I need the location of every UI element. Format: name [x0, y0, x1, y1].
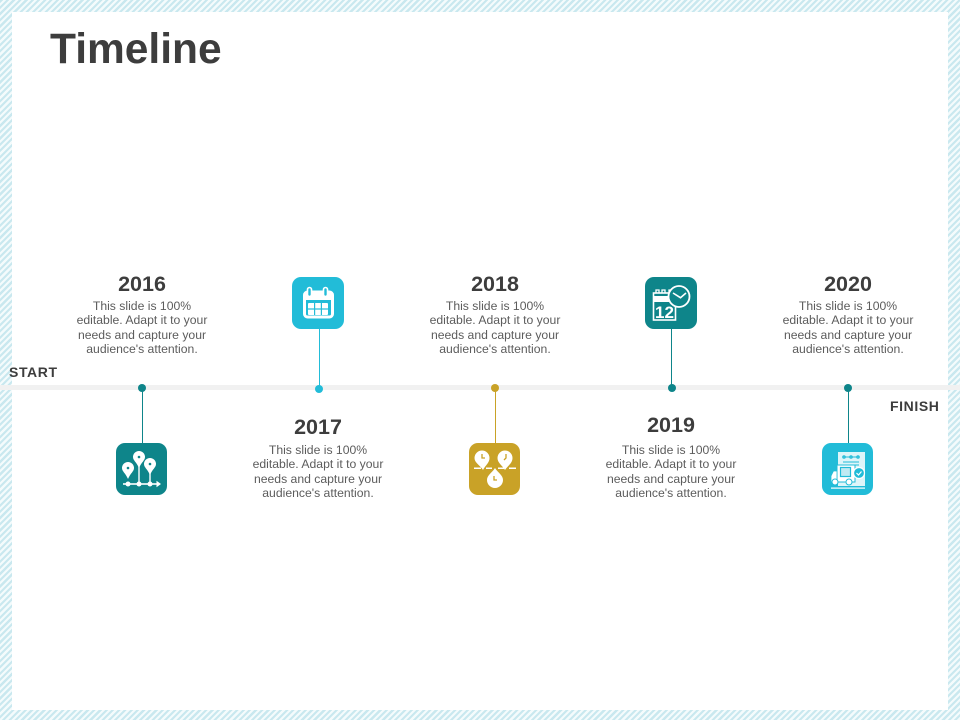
icon: map pins on a line [116, 443, 167, 495]
milestone 2017 text: 2017 [294, 415, 342, 439]
milestone 2018 text [430, 272, 560, 356]
milestone 2018 text: editable. Adapt it to your [430, 313, 560, 327]
milestone 2019 text: audience's attention. [615, 486, 727, 500]
milestone 2016 text: audience's attention. [86, 342, 198, 356]
milestone 2017 text [253, 415, 384, 500]
icon: calendar 12 with clock: 12 [655, 303, 674, 322]
milestone 2017 text: needs and capture your [254, 472, 382, 486]
dot 2017 [314, 384, 322, 392]
timeline bar [0, 385, 960, 390]
milestone 2020 text: needs and capture your [784, 328, 912, 342]
milestone 2020 text: This slide is 100% [799, 299, 897, 313]
milestone 2016 text: needs and capture your [78, 328, 206, 342]
icon: delivery document [822, 443, 873, 495]
milestone 2019 text [606, 413, 736, 500]
milestone 2020 text [783, 272, 914, 356]
connector 2018 [495, 388, 496, 444]
icon: calendar [292, 277, 344, 329]
connector 2016 [142, 388, 143, 444]
connector 2020 [848, 388, 849, 444]
milestone 2016 text: This slide is 100% [93, 299, 191, 313]
milestone 2018 text: audience's attention. [439, 342, 551, 356]
dot 2018 [491, 384, 499, 392]
connector 2017 [318, 328, 320, 388]
dot 2020 [844, 384, 852, 392]
milestone 2019 text: needs and capture your [607, 472, 735, 486]
milestone 2020 text: 2020 [824, 272, 872, 296]
milestone 2017 text: This slide is 100% [269, 443, 367, 457]
milestone 2018 text: 2018 [471, 272, 519, 296]
milestone 2016 text: editable. Adapt it to your [77, 313, 207, 327]
milestone 2018 text: This slide is 100% [446, 299, 544, 313]
start label: START [9, 364, 58, 380]
connector 2019 [671, 328, 672, 388]
milestone 2018 text: needs and capture your [431, 328, 559, 342]
dot 2016 [138, 384, 146, 392]
dot 2019 [668, 384, 676, 392]
milestone 2016 text: 2016 [118, 272, 166, 296]
milestone 2019 text: editable. Adapt it to your [606, 457, 736, 471]
milestone 2019 text: This slide is 100% [622, 443, 720, 457]
milestone 2020 text: editable. Adapt it to your [783, 313, 913, 327]
milestone 2017 text: editable. Adapt it to your [253, 457, 383, 471]
milestone 2020 text: audience's attention. [792, 342, 904, 356]
finish label: FINISH [890, 398, 940, 414]
icon: calendar 12 with clock [645, 277, 697, 329]
icon: clock pins [469, 443, 520, 495]
milestone 2019 text: 2019 [647, 413, 695, 437]
milestone 2016 text [77, 272, 208, 356]
title: Timeline [50, 26, 222, 73]
milestone 2017 text: audience's attention. [262, 486, 374, 500]
